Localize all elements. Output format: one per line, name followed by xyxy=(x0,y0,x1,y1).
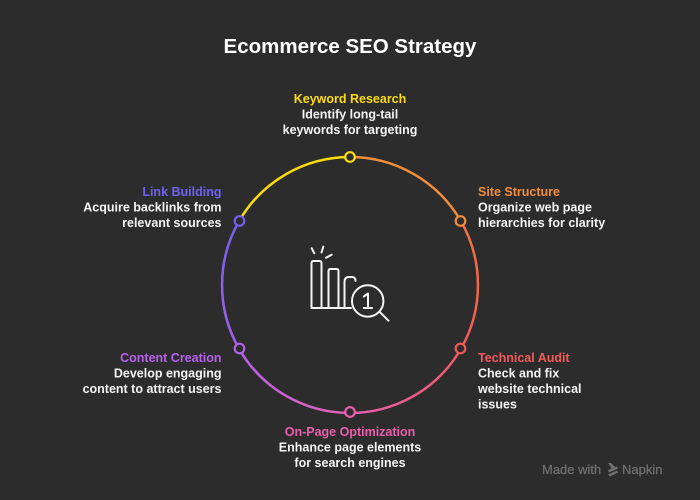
label: link building xyxy=(83,185,222,230)
label: keyword research: Identify long-tail xyxy=(302,108,398,122)
icon: napkin logo xyxy=(608,463,618,476)
node: keyword research xyxy=(345,152,355,162)
cycle ring xyxy=(222,157,478,413)
label: on-page optimization: On-Page Optimization xyxy=(285,425,415,439)
label: technical audit xyxy=(477,351,582,412)
node: content creation xyxy=(235,344,244,353)
node: technical audit xyxy=(456,344,465,353)
label: keyword research: Keyword Research xyxy=(294,92,406,106)
label: on-page optimization xyxy=(279,425,421,470)
label: on-page optimization: Enhance page elements xyxy=(279,440,421,454)
label: site structure: Site Structure xyxy=(478,185,560,199)
watermark: made with napkin xyxy=(542,462,662,477)
label: on-page optimization: for search engines xyxy=(294,456,406,470)
watermark: made with napkin: Made with xyxy=(542,462,601,477)
label: link building: Acquire backlinks from xyxy=(83,200,222,214)
label: site structure: hierarchies for clarity xyxy=(478,216,605,230)
label: link building: Link Building xyxy=(142,185,222,199)
icon: bar chart with magnifier xyxy=(312,247,388,321)
node: on-page optimization xyxy=(345,407,355,417)
node: link building xyxy=(235,216,244,226)
title: Ecommerce SEO Strategy xyxy=(224,35,477,58)
label: content creation: Content Creation xyxy=(120,351,222,365)
label: content creation: Develop engaging xyxy=(114,366,222,380)
watermark: made with napkin: Napkin xyxy=(622,462,662,477)
label: site structure: Organize web page xyxy=(478,200,592,214)
label: technical audit: Check and fix xyxy=(478,366,559,380)
label: site structure xyxy=(478,185,605,230)
label: technical audit: website technical xyxy=(477,382,582,396)
label: keyword research xyxy=(283,92,417,137)
label: content creation xyxy=(83,351,222,396)
node: site structure xyxy=(456,216,465,226)
label: keyword research: keywords for targeting xyxy=(283,123,417,137)
label: content creation: content to attract users xyxy=(83,382,222,396)
label: link building: relevant sources xyxy=(122,216,222,230)
label: technical audit: Technical Audit xyxy=(478,351,571,365)
label: technical audit: issues xyxy=(478,398,517,412)
